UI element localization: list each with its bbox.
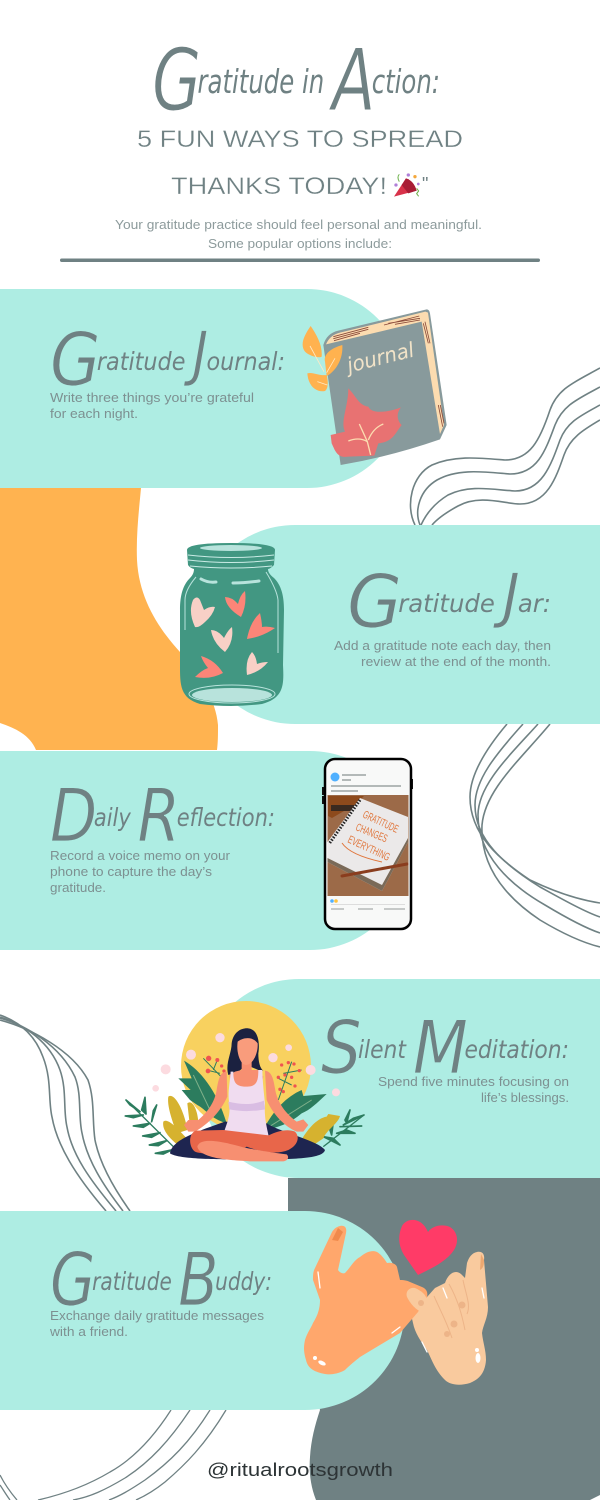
panel shape	[0, 1211, 404, 1410]
heading: M	[413, 1006, 468, 1091]
heading: S	[321, 1006, 361, 1091]
notebook handwriting	[346, 809, 400, 864]
icon: pinky promise hands	[304, 1226, 488, 1385]
handle credit: @ritualrootsgrowth	[207, 1460, 393, 1480]
icon: phone with notebook photo	[322, 759, 413, 929]
heading: ratitude	[398, 589, 503, 618]
heading: D	[50, 774, 97, 859]
body text: Spend five minutes focusing on	[378, 1075, 569, 1089]
body text	[334, 639, 551, 669]
panel shape	[0, 751, 409, 950]
notebook handwriting: EVERYTHING	[346, 834, 392, 864]
panel shape	[0, 289, 406, 488]
panel shape	[196, 525, 600, 724]
panel: daily reflection	[0, 751, 413, 950]
heading: uddy:	[215, 1267, 272, 1296]
heading: G	[50, 318, 100, 403]
heading: ratitude	[97, 347, 193, 376]
body text: Record a voice memo on your	[50, 849, 230, 863]
icon: party popper	[394, 173, 420, 197]
stray quote mark: "	[422, 174, 428, 194]
intro line 1: Your gratitude practice should feel personal and meaningful.	[115, 217, 482, 232]
notebook handwriting: CHANGES	[354, 822, 389, 845]
title: ction:	[372, 62, 440, 101]
body text: Add a gratitude note each day, then	[334, 639, 551, 653]
wavy lines: middle right	[470, 724, 600, 947]
panel shape	[200, 979, 600, 1178]
wavy lines: top right	[410, 368, 600, 525]
heading: aily	[94, 803, 137, 832]
body text: gratitude.	[50, 881, 106, 895]
body text: review at the end of the month.	[361, 655, 551, 669]
wavy lines: bottom left	[0, 1410, 226, 1500]
heading: G	[50, 1238, 95, 1323]
heading: ar:	[518, 589, 551, 618]
body text	[378, 1075, 569, 1105]
divider rule	[60, 258, 540, 262]
icon: mason jar with hearts	[180, 543, 284, 706]
panel: silent meditation	[125, 979, 600, 1178]
body text: for each night.	[50, 407, 138, 421]
body text	[50, 849, 230, 895]
heading: ournal:	[207, 347, 285, 376]
heading: J	[184, 319, 208, 389]
title: G	[152, 31, 201, 131]
heading: eflection:	[177, 803, 275, 832]
notebook handwriting: GRATITUDE	[361, 809, 400, 836]
journal label: journal	[342, 338, 417, 378]
body text	[49, 1309, 264, 1339]
body text: with a friend.	[49, 1325, 128, 1339]
icon: meditating woman	[125, 1001, 364, 1161]
heading: J	[493, 561, 520, 631]
panel: gratitude journal	[0, 289, 447, 488]
heading: ratitude	[92, 1267, 178, 1296]
body text: Write three things you’re grateful	[50, 391, 254, 405]
subtitle line 1: 5 FUN WAYS TO SPREAD	[137, 126, 463, 153]
body text: life’s blessings.	[481, 1091, 569, 1105]
body text: Exchange daily gratitude messages	[50, 1309, 264, 1323]
heading: R	[137, 774, 180, 859]
grey background blob	[288, 1178, 600, 1500]
subtitle line 2: THANKS TODAY!	[171, 173, 387, 200]
orange background blob	[0, 488, 218, 750]
panel: gratitude buddy	[0, 1211, 488, 1410]
heading: editation:	[464, 1035, 569, 1064]
icon: journal book	[303, 309, 447, 465]
wavy lines: left	[0, 1015, 130, 1211]
title: A	[328, 31, 375, 131]
body text: phone to capture the day’s	[50, 865, 212, 879]
intro line 2: Some popular options include:	[208, 236, 392, 251]
heading: G	[347, 560, 402, 645]
icon: heart	[399, 1220, 457, 1275]
body text	[50, 391, 254, 421]
title: ratitude in	[198, 62, 332, 101]
heading: ilent	[358, 1035, 413, 1064]
header block	[60, 31, 540, 262]
heading: B	[178, 1238, 218, 1323]
panel: gratitude jar	[180, 525, 600, 724]
